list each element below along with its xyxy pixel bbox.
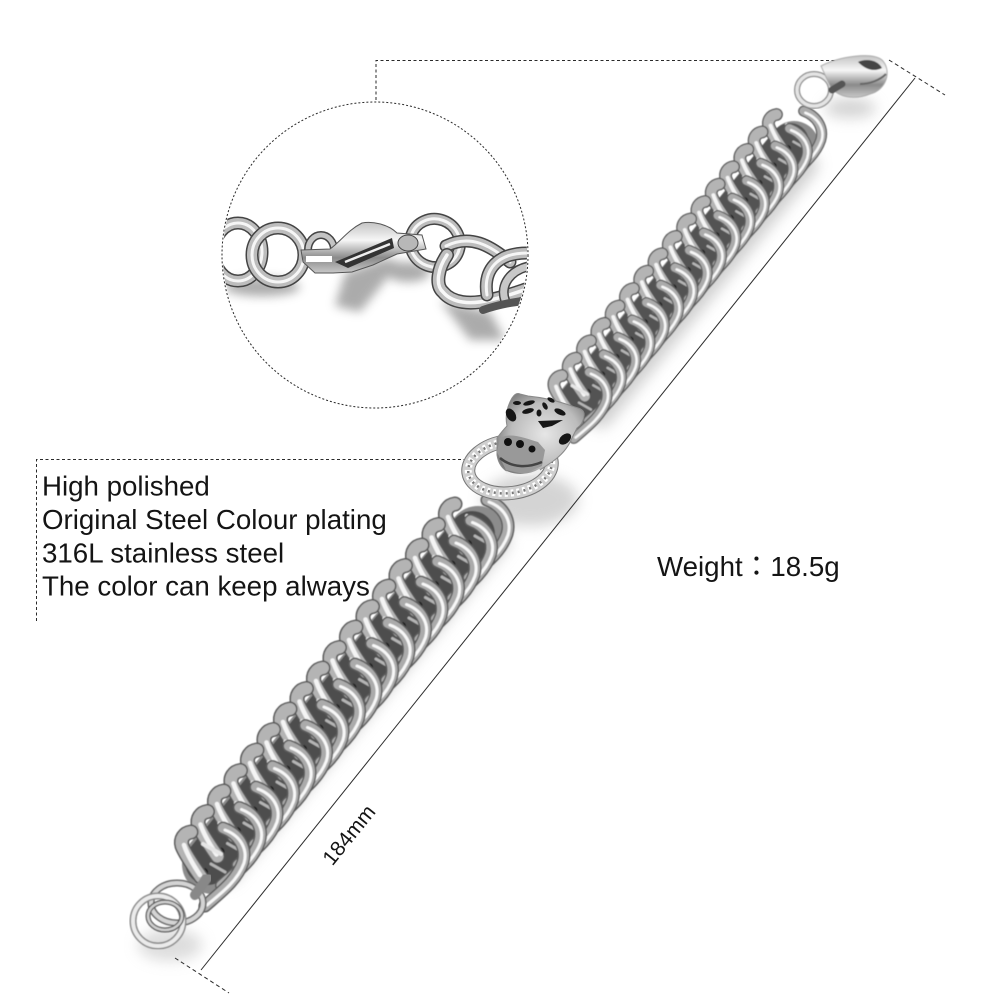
lobster clasp, upper right [797,56,887,106]
inset chain and clasp [214,212,530,340]
features text block [42,470,387,602]
end rings, lower left [133,878,207,946]
features text block: 316L stainless steel [42,538,284,568]
crystal ring connector [465,435,555,499]
length label: 184mm [318,801,380,870]
leopard muzzle [497,435,545,474]
inset shadows [224,258,505,340]
inset dotted circle [222,102,528,408]
features text block: High polished [42,470,210,502]
detail inset: clasp close-up [214,102,530,408]
bracelet chain [133,56,887,946]
leopard head clasp [497,394,584,475]
features text block: Original Steel Colour plating [42,504,387,535]
weight label: Weight：18.5g [657,551,840,582]
inset jump rings [214,212,467,282]
upper chain section [554,111,822,438]
bracelet shadow [138,98,876,961]
inset lobster clasp [301,222,426,273]
lower chain section [181,500,509,906]
features text block: The color can keep always [42,570,370,602]
inset curb links [438,241,530,310]
leopard spots [504,396,573,447]
